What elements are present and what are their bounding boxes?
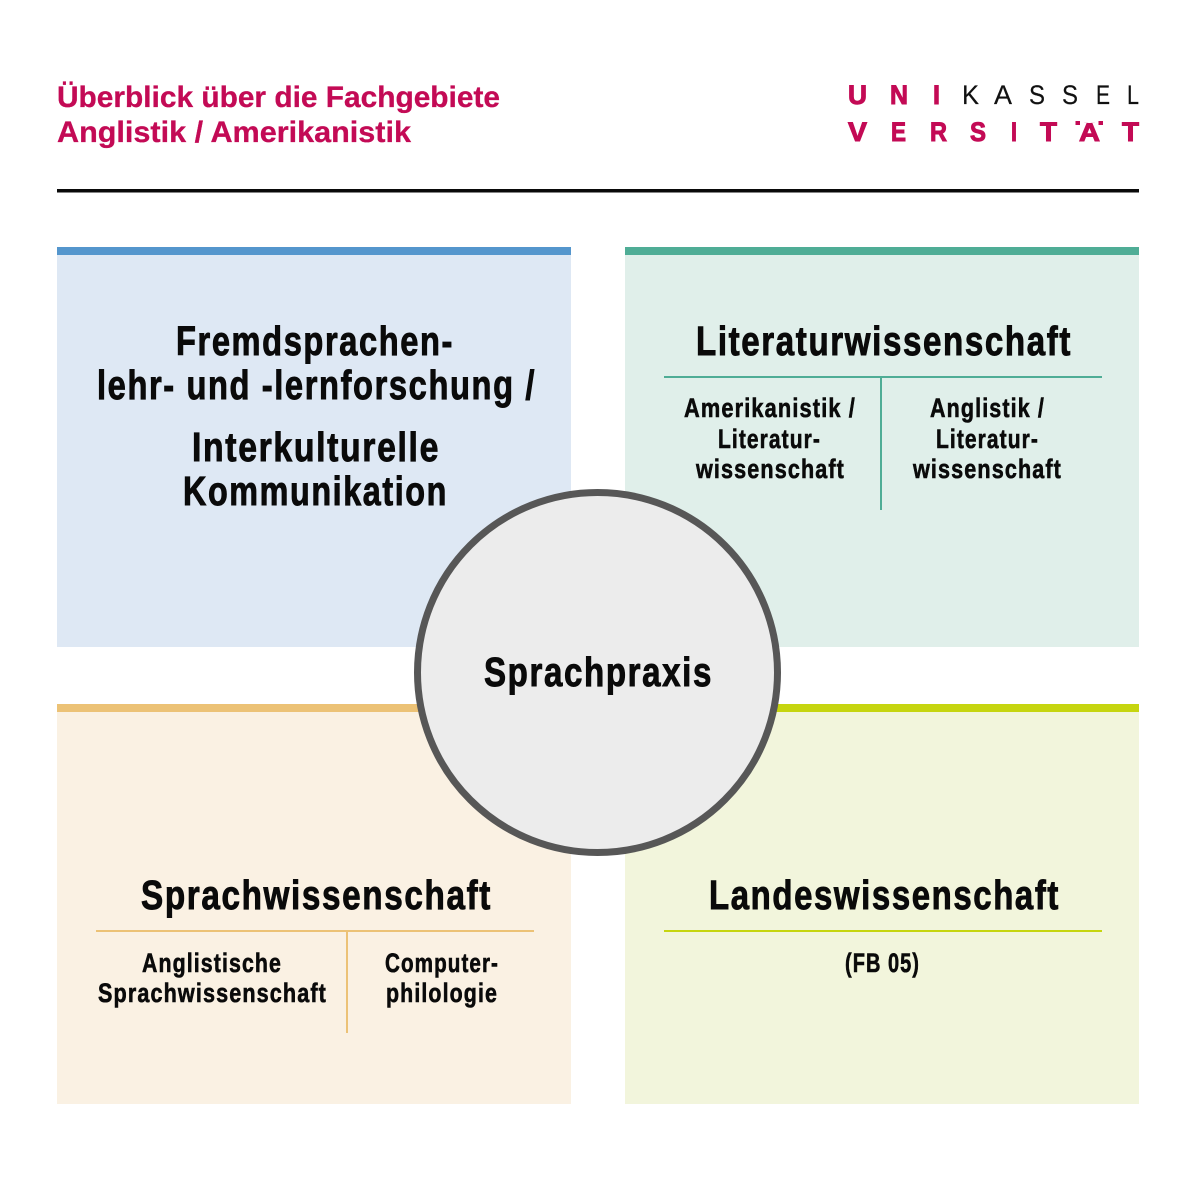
panel: Sprachwissenschaft: Computer- — [385, 948, 499, 978]
panel: Landeswissenschaft: (FB 05) — [845, 948, 920, 978]
panel: Literaturwissenschaft — [625, 247, 1139, 647]
logo: Uni Kassel Versität: Ä — [1079, 119, 1100, 147]
panel: Sprachwissenschaft: Sprachwissenschaft — [98, 978, 327, 1008]
logo: Uni Kassel Versität: S — [1062, 80, 1078, 110]
logo: Uni Kassel Versität: N — [890, 80, 908, 110]
panel: Landeswissenschaft: Landeswissenschaft — [709, 872, 1060, 918]
panel: Fremdsprachen — [57, 247, 571, 647]
panel: Sprachwissenschaft: Sprachwissenschaft — [141, 872, 492, 918]
panel: Landeswissenschaft — [625, 704, 1139, 1104]
logo: Uni Kassel Versität: V — [848, 117, 867, 147]
panel: Literaturwissenschaft: Literaturwissenschaft — [696, 318, 1072, 364]
panel: Literaturwissenschaft: Amerikanistik / — [684, 393, 856, 423]
logo: Uni Kassel Versität: S — [970, 117, 986, 147]
panel: Fremdsprachen: lehr- und -lernforschung / — [97, 362, 536, 408]
logo: Uni Kassel Versität: S — [1029, 80, 1045, 110]
logo: Uni Kassel Versität: T — [1040, 117, 1058, 147]
title: Überblick über die Fachgebiete — [57, 81, 500, 114]
panel: Sprachwissenschaft: philologie — [386, 978, 498, 1008]
panel: Literaturwissenschaft: Literatur- — [936, 424, 1039, 454]
logo: Uni Kassel Versität: E — [891, 117, 906, 147]
panel: Literaturwissenschaft: Literatur- — [718, 424, 821, 454]
center circle: Sprachpraxis — [418, 492, 778, 852]
logo: Uni Kassel Versität: E — [1096, 80, 1110, 110]
panel: Sprachwissenschaft — [57, 704, 571, 1104]
center circle: Sprachpraxis: Sprachpraxis — [484, 649, 713, 695]
logo: Uni Kassel Versität: I — [1011, 117, 1017, 147]
panel: Literaturwissenschaft: wissenschaft — [695, 454, 845, 484]
panel: Sprachwissenschaft: Anglistische — [142, 948, 282, 978]
panel: Literaturwissenschaft: Anglistik / — [930, 393, 1045, 423]
panel: Fremdsprachen: Interkulturelle — [192, 424, 440, 470]
title — [57, 81, 500, 149]
panel: Literaturwissenschaft: wissenschaft — [912, 454, 1062, 484]
logo: Uni Kassel Versität: L — [1127, 80, 1139, 110]
logo: Uni Kassel Versität: T — [1122, 117, 1140, 147]
title: Anglistik / Amerikanistik — [57, 116, 411, 149]
logo: Uni Kassel Versität: K — [962, 80, 979, 110]
logo: Uni Kassel Versität — [848, 85, 1140, 142]
panel: Fremdsprachen: Kommunikation — [183, 468, 448, 514]
logo: Uni Kassel Versität: I — [933, 80, 940, 110]
panel: Fremdsprachen: Fremdsprachen- — [176, 318, 454, 364]
logo: Uni Kassel Versität: A — [994, 80, 1012, 110]
logo: Uni Kassel Versität: R — [930, 117, 947, 147]
logo: Uni Kassel Versität: U — [848, 80, 867, 110]
